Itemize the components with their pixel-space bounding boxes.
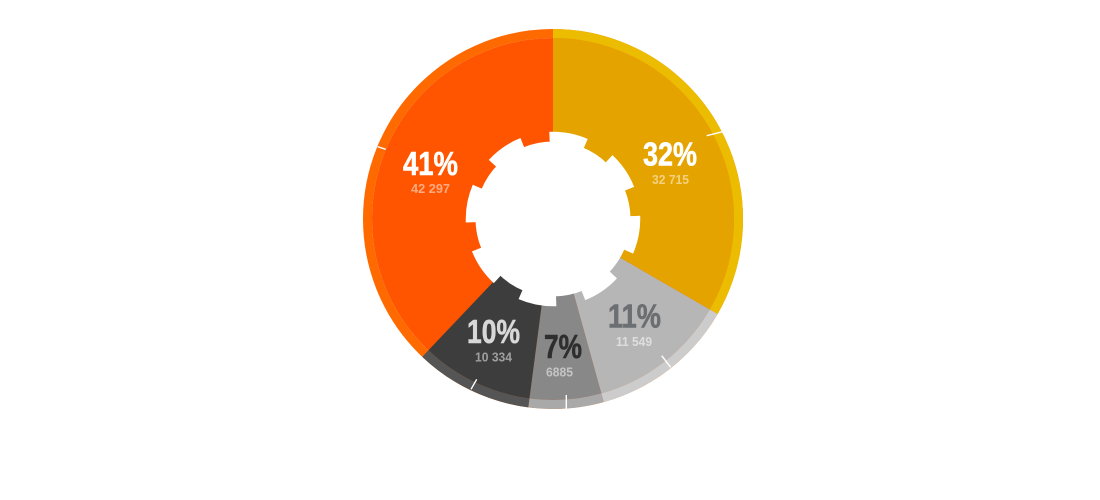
label: 41%: 41% (403, 145, 458, 182)
label: 32% (643, 136, 697, 187)
white tick marks (378, 132, 723, 408)
segment: yellow 32% (368, 34, 738, 404)
label: 7%: 6885 (546, 364, 573, 380)
label: 10%: 10% (467, 313, 520, 350)
segment: mid grey 7% (368, 34, 738, 404)
label: 41%: 42 297 (411, 181, 450, 196)
label: 7% (544, 328, 582, 380)
label: 11%: 11% (608, 298, 661, 334)
label: 32%: 32 715 (652, 172, 689, 187)
donut rings (368, 34, 738, 404)
label: 10%: 10 334 (475, 350, 513, 364)
label: 10% (467, 313, 520, 364)
label: 11%: 11 549 (616, 334, 652, 349)
gear-shaped centre hole (468, 134, 638, 304)
label: 32%: 32% (643, 136, 697, 172)
label: 11% (608, 298, 661, 349)
segment: light grey 11% (368, 34, 738, 404)
segment: orange 41% (368, 34, 738, 404)
label: 7%: 7% (544, 328, 582, 365)
segment: dark grey 10% (368, 34, 738, 404)
label: 41% (403, 145, 458, 196)
